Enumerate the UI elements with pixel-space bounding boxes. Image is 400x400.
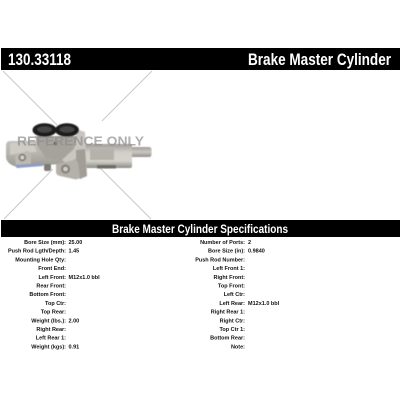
watermark text: REFERENCE ONLY [17, 134, 145, 148]
upper reservoir ports [32, 123, 79, 137]
small port hole [54, 142, 57, 145]
lower port flange [56, 160, 80, 180]
left specification column: Weight (kgs): [31, 344, 66, 350]
right specification column: Number of Ports: [200, 240, 245, 246]
left specification column: Front End: [38, 266, 66, 272]
right specification column: Left Front 1: [213, 266, 245, 272]
part number: 130.33118 [8, 51, 71, 69]
watermark cross lines [3, 71, 152, 219]
push rod [130, 147, 152, 157]
right specification column: Top Front: [218, 284, 245, 290]
left specification column [8, 240, 100, 350]
body highlight [10, 143, 37, 155]
flange shade [76, 149, 87, 179]
boss highlight [62, 137, 78, 163]
cylinder lower step [97, 165, 116, 168]
right specification column: Left Rear: [219, 301, 245, 307]
left specification column: Rear Front: [36, 284, 66, 290]
left body [6, 136, 78, 167]
right specification column: Bottom Rear: [210, 336, 245, 342]
left specification column: M12x1.0 bbl [68, 275, 100, 281]
right specification column: Right Rear 1: [211, 310, 245, 316]
left specification column: 0.91 [68, 344, 79, 350]
blue edge tint [14, 163, 43, 168]
right specification column: Right Ctr: [220, 318, 245, 324]
left specification column: Mounting Hole Qty: [15, 257, 66, 263]
left specification column: 2.00 [68, 318, 79, 324]
right specification column: Right Front: [214, 275, 245, 281]
right specification column: Note: [231, 344, 245, 350]
cylinder detail panel [90, 149, 114, 160]
left specification column: Left Front: [38, 275, 66, 281]
left specification column: Top Rear: [41, 310, 66, 316]
left specification column: Bore Size (mm): [24, 240, 66, 246]
left mounting ear [15, 151, 31, 168]
right specification column: Left Ctr: [224, 292, 245, 298]
left specification column: Bottom Front: [29, 292, 66, 298]
centre mounting flange [76, 129, 87, 179]
left specification column: Top Ctr: [45, 301, 66, 307]
left specification column: Weight (lbs.): [31, 318, 66, 324]
right specification column: 2 [248, 240, 251, 246]
right specification column: Push Rod Number: [195, 257, 245, 263]
header bar [1, 48, 400, 70]
left specification column: Left Rear 1: [36, 336, 66, 342]
specifications heading: Brake Master Cylinder Specifications [112, 222, 288, 236]
right specification column: Top Ctr 1: [219, 327, 245, 333]
illustration: brake master cylinder [6, 123, 152, 180]
specifications bar [1, 220, 400, 237]
right specification column: M12x1.0 bbl [248, 301, 280, 307]
lower bleed nipple [44, 164, 51, 171]
left specification column: 1.45 [68, 249, 79, 255]
right specification column [195, 240, 280, 350]
right specification column: Bore Size (in): [208, 249, 245, 255]
reservoir boss [35, 136, 77, 161]
left specification column: Right Rear: [36, 327, 66, 333]
right specification column: 0.9840 [248, 249, 265, 255]
left specification column: 25.00 [68, 240, 82, 246]
main cylinder [85, 144, 132, 168]
left specification column: Push Rod Lgth/Depth: [8, 249, 66, 255]
